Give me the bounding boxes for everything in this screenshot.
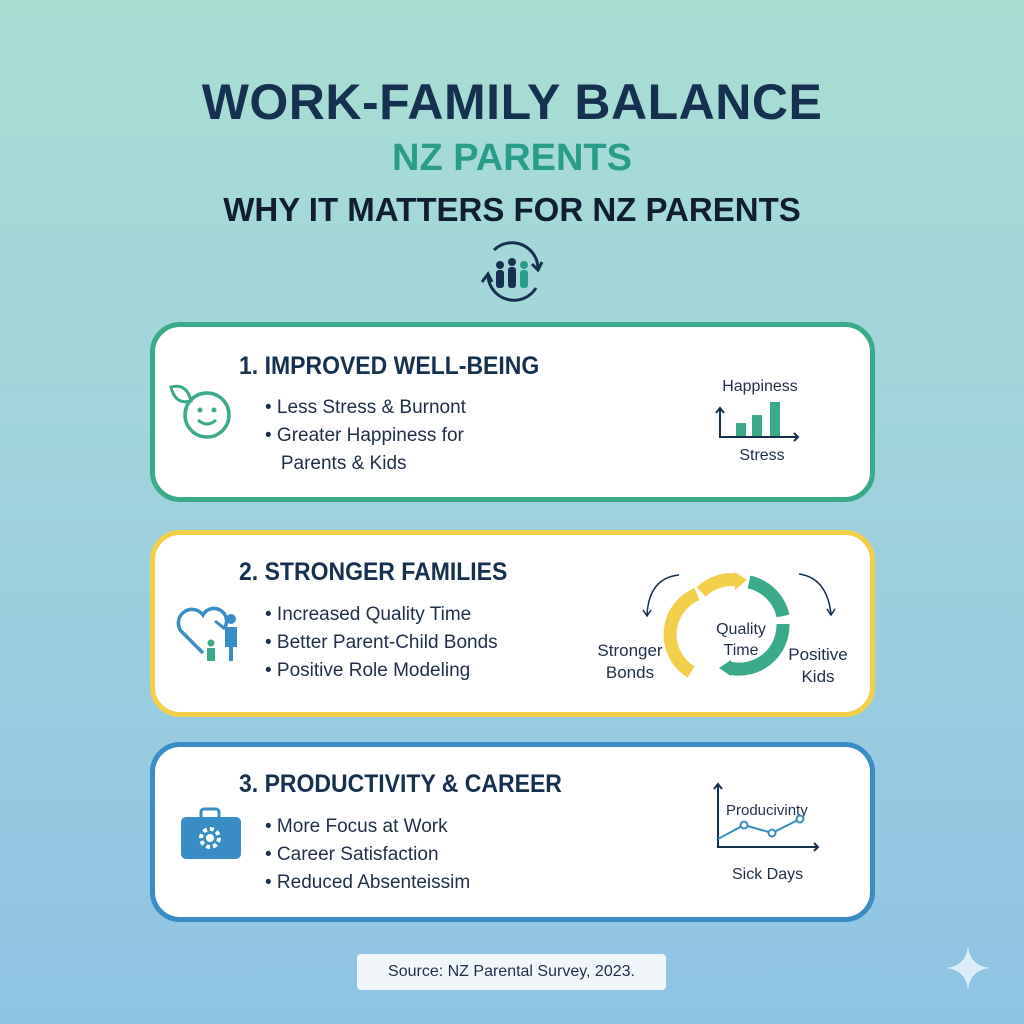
bullets <box>265 816 470 893</box>
bullets: • More Focus at Work <box>265 816 448 837</box>
chart: happiness bars: Stress <box>739 447 785 464</box>
panel: stronger families <box>150 530 875 717</box>
heading: 3. PRODUCTIVITY & CAREER <box>239 770 562 798</box>
icon: family cycle <box>480 241 544 302</box>
bullets <box>265 604 498 681</box>
bullets: • Greater Happiness for <box>265 425 464 446</box>
icon: briefcase gear <box>181 808 241 859</box>
chart: happiness bars: Happiness <box>722 378 798 395</box>
bullets: • Positive Role Modeling <box>265 660 470 681</box>
bullets <box>265 397 466 474</box>
panel: well-being <box>150 322 875 502</box>
bullets: • Better Parent-Child Bonds <box>265 632 498 653</box>
diagram: quality time cycle: Bonds <box>606 663 654 682</box>
diagram: quality time cycle: Quality <box>716 621 766 638</box>
diagram: quality time cycle: Positive <box>788 645 848 664</box>
bullets: • Reduced Absenteissim <box>265 872 470 893</box>
bullets: • Increased Quality Time <box>265 604 471 625</box>
diagram: quality time cycle: Kids <box>801 667 835 686</box>
icon: heart and family <box>176 606 237 661</box>
diagram: quality time cycle: Time <box>724 642 759 659</box>
title: WORK-FAMILY BALANCE <box>202 74 822 130</box>
source note: Source: NZ Parental Survey, 2023. <box>388 963 635 980</box>
chart: productivity line: Sick Days <box>732 866 803 883</box>
chart: productivity line <box>713 782 820 883</box>
diagram: quality time cycle <box>597 572 848 686</box>
subtitle: why it matters: WHY IT MATTERS FOR NZ PARENTS <box>223 191 801 228</box>
source note <box>357 954 666 990</box>
bullets: • Career Satisfaction <box>265 844 439 865</box>
subtitle: NZ parents: NZ PARENTS <box>392 137 632 179</box>
bullets: • Less Stress & Burnont <box>265 397 466 418</box>
icon: sparkle <box>946 946 990 990</box>
heading: 1. IMPROVED WELL-BEING <box>239 352 539 380</box>
diagram: quality time cycle: Stronger <box>597 641 663 660</box>
chart: happiness bars <box>715 378 800 464</box>
panel: productivity <box>150 742 875 922</box>
icon: smiley leaf <box>169 384 231 439</box>
bullets: Parents & Kids <box>281 453 407 474</box>
heading: 2. STRONGER FAMILIES <box>239 558 507 586</box>
chart: productivity line: Producivinty <box>726 802 808 819</box>
